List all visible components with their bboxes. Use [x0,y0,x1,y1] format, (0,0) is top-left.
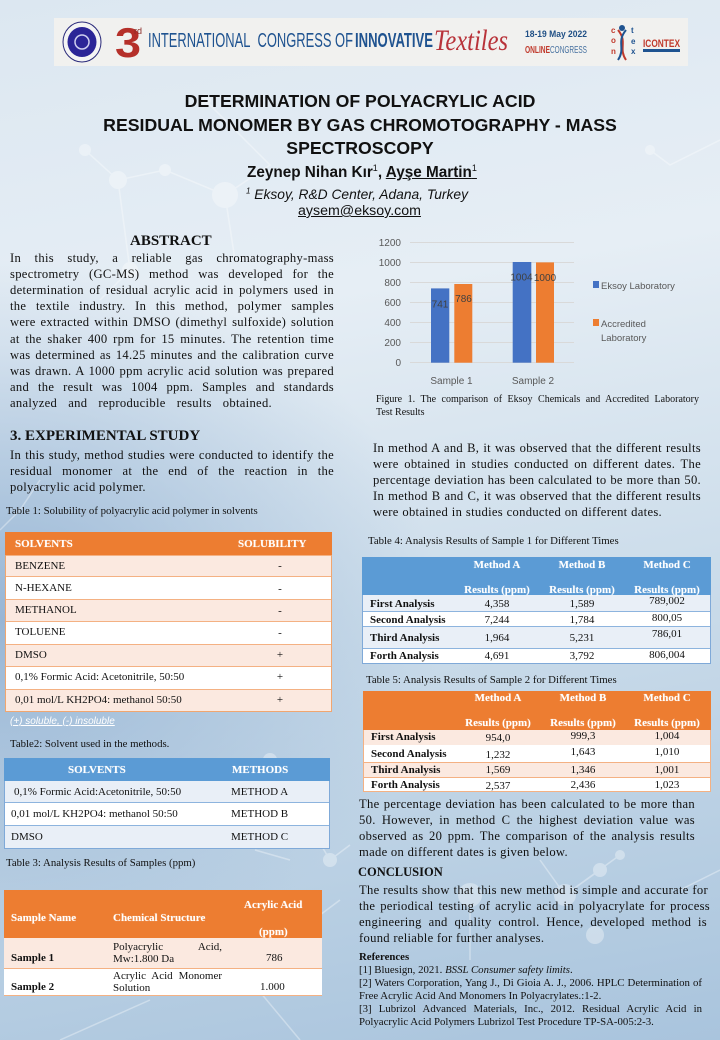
table 5: 999,3 [571,730,595,742]
table 5: Method C [643,692,691,704]
icon: conference logos [611,25,680,60]
table 4: Method B [559,559,605,571]
table 3: 786 [266,952,282,964]
abstract heading: ABSTRACT [130,233,212,249]
table 3: Sample Name [11,912,76,924]
table 1: + [277,671,283,683]
table 5 caption: Table 5: Analysis Results of Sample 2 for Different Times [366,674,617,686]
table 1: METHANOL [15,604,77,616]
table 4: 786,01 [652,628,682,640]
deviation text: The percentage deviation has been calculated to be more than [359,797,695,811]
table 1: + [277,649,283,661]
conclusion text [359,883,710,945]
banner title: INNOVATIVE [355,30,433,52]
table 1: - [278,560,282,572]
references: References [359,951,409,963]
table 5: Second Analysis [371,748,446,760]
table 3: 1.000 [260,981,285,993]
conclusion text: The results show that this new method is simple and accurate for [359,883,708,897]
email: aysem@eksoy.com [298,203,421,219]
abstract text: and the result was 1004 ppm. Samples and standards [10,380,334,394]
table 1: + [277,694,283,706]
legend: Laboratory [601,333,647,344]
deviation text: 50. However, in method C the highest deviation value was [359,813,695,827]
abstract text: determination of residual acrylic acid in polymers used in [10,283,334,297]
method text: In method A and B, it was observed that the different results [373,441,701,455]
references: Polyacrylic Acid Polymers Lubrizol Test Procedure TP-SA-005:2-3. [359,1016,654,1028]
x axis labels: Sample 2 [512,376,555,387]
table 4: 3,792 [570,650,594,662]
references: [1] Bluesign, 2021. BSSL Consumer safety limits. [359,964,573,976]
table 5: 2,537 [486,780,510,792]
table 5: Method A [475,692,521,704]
table 1 caption: Table 1: Solubility of polyacrylic acid polymer in solvents [6,505,258,517]
icon: conference logos: e [631,37,636,46]
table 4: Results (ppm) [549,584,615,596]
table 2 [4,758,330,849]
table 4: 7,244 [485,614,509,626]
table 1: 0,1% Formic Acid: Acetonitrile, 50:50 [15,671,184,683]
table 5: 1,643 [571,746,595,758]
table 4: Results (ppm) [464,584,530,596]
table 5: 1,569 [486,764,510,776]
icon: university logo [63,22,101,62]
table 4: 789,002 [649,595,685,607]
table 1: DMSO [15,649,47,661]
table 5: Results (ppm) [634,717,700,729]
table 4: Results (ppm) [634,584,700,596]
table 4: First Analysis [370,598,434,610]
banner dates: 18-19 May 2022 [525,29,587,40]
banner dates: ONLINE [525,45,550,56]
table 3: Acrylic Acid [244,899,302,911]
table 2: METHOD C [231,831,288,843]
conclusion text: the periodical testing of acrylic acid in polyacrylate for process [359,899,710,913]
table 2: 0,1% Formic Acid:Acetonitrile, 50:50 [14,786,181,798]
figure caption: Test Results [376,407,424,418]
conclusion text: found reliable for further analyses. [359,931,544,945]
abstract text: was drawn. A 1000 ppm acrylic acid solution was prepared [10,364,334,378]
deviation text [359,797,695,859]
y axis labels: 1000 [379,258,401,269]
table 4 [362,557,711,664]
big 3rd mark: rd [134,26,142,36]
table 5: Method B [560,692,606,704]
table 3: Mw:1.800 Da [113,953,174,965]
y axis labels: 200 [384,338,401,349]
table 1 note: (+) soluble, (-) insoluble [10,716,115,727]
bars: Accredited Laboratory [454,262,554,363]
data labels: 741 [432,300,449,310]
abstract text [10,251,334,410]
experimental text: polyacrylic acid polymer. [10,480,146,494]
table 5: 1,010 [655,746,679,758]
table 5: 1,001 [655,764,679,776]
x axis labels [430,376,555,387]
title [103,91,617,158]
icon: conference logos: n [611,47,616,56]
deviation text: made on different dates is given below. [359,845,568,859]
table 4 caption: Table 4: Analysis Results of Sample 1 for Different Times [368,535,619,547]
figure caption [376,394,699,418]
y axis labels: 1200 [379,238,401,249]
table 3: (ppm) [259,926,288,938]
icon: conference logos: x [631,47,636,56]
table 1: 0,01 mol/L KH2PO4: methanol 50:50 [15,694,182,706]
abstract text: analyzed and reproducible results obtained. [10,396,272,410]
table 4: 1,964 [485,632,509,644]
banner title: INTERNATIONAL CONGRESS OF [148,30,353,52]
data labels: 786 [455,294,472,305]
table 3: Acrylic Acid Monomer [113,970,222,982]
experimental text: In this study, method studies were conducted to identify the [10,448,334,462]
table 5: Forth Analysis [371,779,440,791]
abstract text: In this study, a reliable gas chromatography-mass [10,251,334,265]
table 4: 4,691 [485,650,509,662]
method text: percentage deviation has been calculated to be more than 50. [373,473,701,487]
table 3: Chemical Structure [113,912,205,924]
table 5: 1,232 [486,749,510,761]
table 5: Third Analysis [371,764,440,776]
references: [2] Waters Corporation, Yang J., Di Gioia A. J., 2006. HPLC Determination of [359,977,702,989]
legend: Eksoy Laboratory [601,281,675,292]
method text [373,441,701,519]
table 4: 800,05 [652,612,682,624]
title: RESIDUAL MONOMER BY GAS CHROMOTOGRAPHY - MASS [103,114,617,134]
table 4: 806,004 [649,649,685,661]
header banner [54,18,688,66]
data labels: 1004 [510,272,533,284]
table 4: 1,784 [570,614,594,626]
legend [593,281,675,344]
table 4: 1,589 [570,598,594,610]
y axis labels: 600 [384,298,401,309]
banner title: Textiles [434,24,508,57]
method text: In method B and C, it was observed that the different results [373,489,701,503]
table 5: 1,004 [655,730,679,742]
abstract text: were extracted within DMSO (dimethyl sulfoxide) solution [10,315,334,329]
table 3: Sample 1 [11,952,54,964]
table 1: SOLUBILITY [238,538,306,550]
affiliation: 1 Eksoy, R&D Center, Adana, Turkey [246,186,468,202]
abstract text: was determined as 14.25 minutes and the calibration curve [10,348,334,362]
table 4: Method A [474,559,520,571]
bar chart [379,238,675,387]
table 4: 4,358 [485,598,509,610]
table 2: METHODS [232,764,288,776]
data labels [432,272,557,310]
table 2 caption: Table2: Solvent used in the methods. [10,738,169,750]
table 5: First Analysis [371,731,435,743]
table 4: Second Analysis [370,614,446,626]
table 2: SOLVENTS [68,764,126,776]
icon: conference logos: t [631,26,634,35]
data labels: 1000 [534,273,557,284]
table 5 [363,691,711,792]
table 5: Results (ppm) [550,717,616,729]
table 1: BENZENE [15,560,65,572]
y axis labels [379,238,401,369]
table 2: 0,01 mol/L KH2PO4: methanol 50:50 [11,808,178,820]
big 3rd mark: 3 [115,19,141,66]
banner title [148,24,508,57]
icon: conference logos: c [611,26,616,35]
table 4: Forth Analysis [370,650,439,662]
table 4: Third Analysis [370,632,439,644]
y axis labels: 0 [395,358,401,369]
table 2: METHOD B [231,808,288,820]
figure caption: Figure 1. The comparison of Eksoy Chemicals and Accredited Laboratory [376,394,699,405]
table 5: 1,023 [655,779,679,791]
table 1: - [278,627,282,639]
table 3: Solution [113,982,150,994]
references [359,951,702,1028]
deviation text: observed as 20 ppm. The comparison of the analysis results [359,829,695,843]
conclusion text: engineering and quality control. Hence, developed method is [359,915,707,929]
table 5: 954,0 [486,732,510,744]
method text: were obtained in studies conducted on different dates. The [373,457,701,471]
y axis labels: 800 [384,278,401,289]
experimental text [10,448,334,494]
bars: Eksoy Laboratory [431,262,531,363]
experimental text: residual monomer at the end of the reaction in the [10,464,334,478]
table 1: N-HEXANE [15,582,72,594]
table 1: TOLUENE [15,626,66,638]
x axis labels: Sample 1 [430,376,473,387]
icon: conference logos: o [611,36,616,45]
experimental heading: 3. EXPERIMENTAL STUDY [10,428,200,444]
abstract text: the textile industry. In this method, polymer samples [10,299,334,313]
table 4: Method C [643,559,691,571]
table 4: 5,231 [570,632,594,644]
references: Free Acrylic Acid And Monomers In Polyacrylates.:1-2. [359,990,601,1002]
abstract text: at the shaker 400 rpm for 15 minutes. The retention time [10,332,334,346]
table 5: 2,436 [571,779,595,791]
y axis labels: 400 [384,318,401,329]
references: [3] Lubrizol Advanced Materials, Inc., 2012. Residual Acrylic Acid in [359,1003,702,1015]
banner dates: CONGRESS [550,45,587,56]
table 2: METHOD A [231,786,288,798]
table 1: - [278,583,282,595]
conclusion heading: CONCLUSION [358,865,443,879]
banner dates [525,29,587,56]
method text: were obtained in studies conducted on different dates. [373,505,662,519]
table 1 [5,532,332,712]
table 3 [4,890,322,996]
table 1: - [278,605,282,617]
table 3 caption: Table 3: Analysis Results of Samples (ppm) [6,857,195,869]
title: DETERMINATION OF POLYACRYLIC ACID [185,91,535,111]
table 3: Sample 2 [11,981,54,993]
table 1: SOLVENTS [15,538,73,550]
table 3: Polyacrylic Acid, [113,941,222,953]
table 5: Results (ppm) [465,717,531,729]
table 5: 1,346 [571,764,595,776]
table 2: DMSO [11,831,43,843]
legend: Accredited [601,319,646,330]
abstract text: spectrometry (GC-MS) method was developed for the [10,267,334,281]
authors: Zeynep Nihan Kır1, Ayşe Martin1 [247,163,477,181]
title: SPECTROSCOPY [286,138,434,158]
